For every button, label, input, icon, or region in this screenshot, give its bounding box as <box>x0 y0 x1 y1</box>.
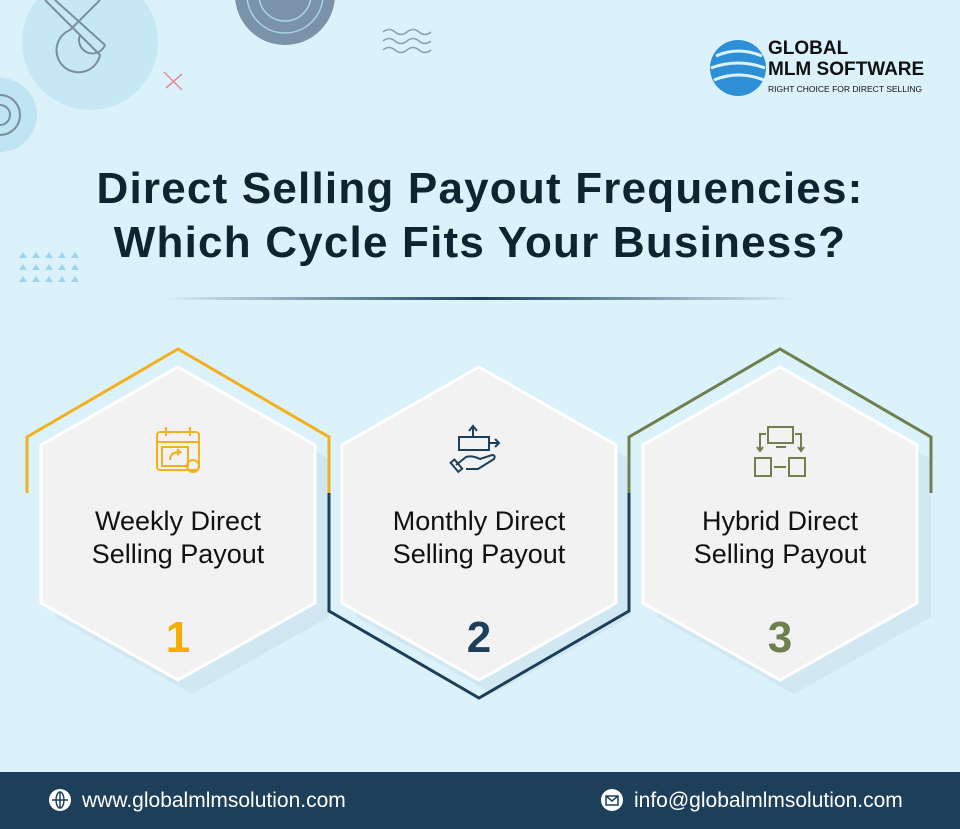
icon: money hand <box>451 426 499 472</box>
card 2: Selling Payout <box>393 539 566 569</box>
card 3: Hybrid Direct <box>702 506 859 536</box>
email: info@globalmlmsolution.com <box>634 789 903 812</box>
outline: hybrid <box>629 349 931 493</box>
icon: hybrid <box>755 427 805 476</box>
card 3: 3 <box>768 613 792 662</box>
title <box>96 164 864 267</box>
card 3: Selling Payout <box>694 539 867 569</box>
logo: GLOBAL <box>768 38 848 59</box>
logo: MLM SOFTWARE <box>768 59 924 80</box>
card 1 <box>41 367 315 680</box>
outline: monthly <box>329 493 629 698</box>
card 3 <box>643 367 917 680</box>
card 2 <box>342 367 616 680</box>
card 1: Weekly Direct <box>95 506 262 536</box>
logo <box>710 38 924 96</box>
icon: calendar <box>157 427 199 472</box>
card 2: 2 <box>467 613 491 662</box>
title: Which Cycle Fits Your Business? <box>114 218 846 267</box>
logo: RIGHT CHOICE FOR DIRECT SELLING <box>768 84 922 94</box>
card 1: 1 <box>166 613 190 662</box>
title: Direct Selling Payout Frequencies: <box>96 164 864 213</box>
footer <box>0 772 960 829</box>
card 1: Selling Payout <box>92 539 265 569</box>
outline: weekly <box>27 349 329 493</box>
website: www.globalmlmsolution.com <box>82 789 346 812</box>
card 2: Monthly Direct <box>393 506 566 536</box>
